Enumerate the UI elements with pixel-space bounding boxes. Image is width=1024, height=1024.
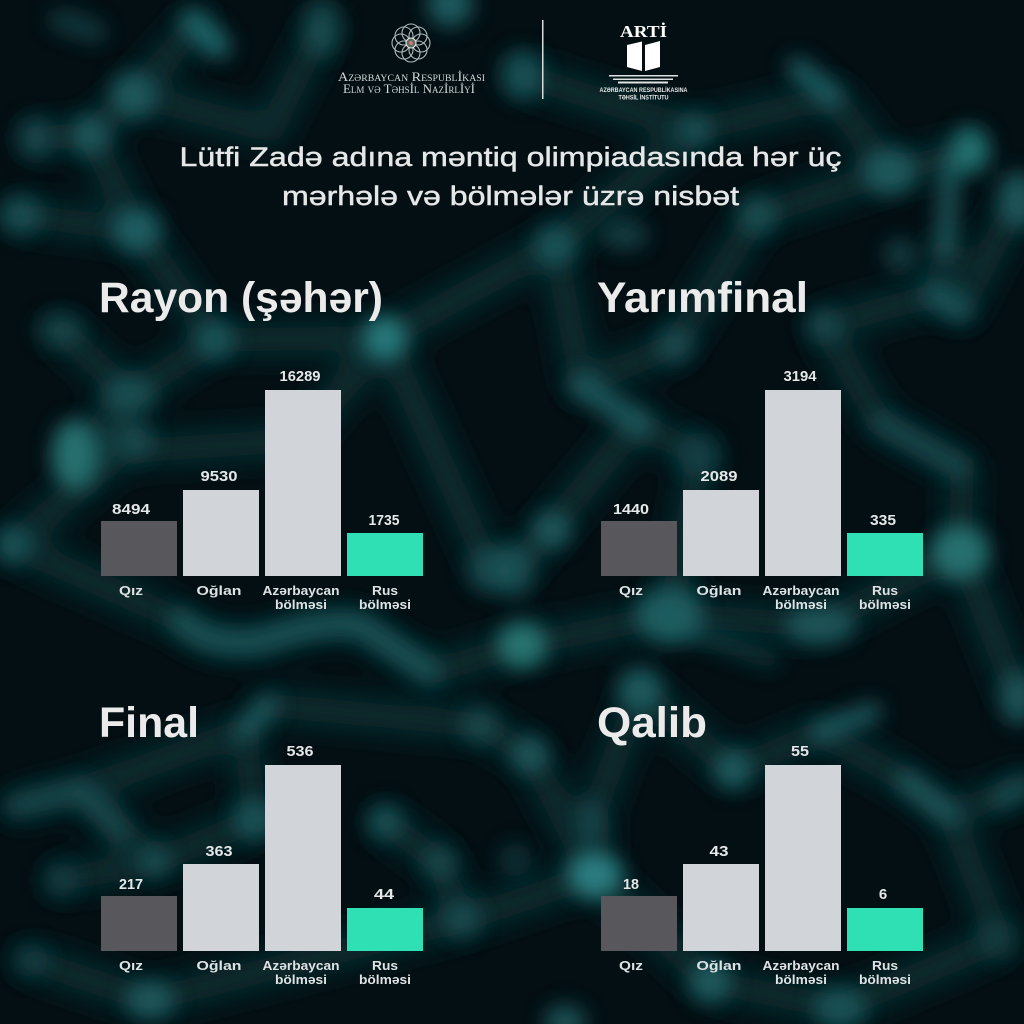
institute name: AZƏRBAYCAN RESPUBLİKASINA <box>600 87 688 94</box>
bar chart: bölməsi <box>275 972 327 987</box>
icon: book base lines <box>609 75 678 84</box>
bar chart: 1735 <box>368 512 400 529</box>
bar chart: 2089 <box>700 468 738 485</box>
institute name second line: TƏHSİL İNSTİTUTU <box>618 94 668 102</box>
bar chart: Oğlan <box>696 958 742 973</box>
heading: Yarımfinal <box>597 274 808 322</box>
icon: open book <box>627 41 660 71</box>
bar chart: bölməsi <box>775 597 827 612</box>
panel: Yarımfinal <box>597 274 923 612</box>
bar chart: 9530 <box>200 468 238 485</box>
bar chart: 18 <box>623 876 639 893</box>
bar chart: 217 <box>119 876 143 893</box>
bar chart: bölməsi <box>359 597 411 612</box>
bar chart: 3194 <box>784 368 817 385</box>
logo: ministry <box>338 24 485 84</box>
divider between logos <box>542 20 544 99</box>
bar chart: Oğlan <box>196 583 242 598</box>
icon: ministry emblem <box>392 24 430 62</box>
bar chart: Azərbaycan <box>262 958 340 973</box>
bar chart: bölməsi <box>859 972 911 987</box>
bar chart <box>101 368 423 612</box>
title line 2: mərhələ və bölmələr üzrə nisbət <box>282 181 740 211</box>
bar chart: 44 <box>374 886 395 903</box>
bar chart: 16289 <box>280 368 320 385</box>
bar chart: 335 <box>870 512 896 529</box>
bar chart: Qız <box>119 958 144 973</box>
logo: ARTI <box>600 22 688 94</box>
bar chart: Oğlan <box>696 583 742 598</box>
panel: Final <box>99 699 423 987</box>
bar chart: Qız <box>119 583 144 598</box>
bar chart: Rus <box>872 958 898 973</box>
ministry name second line: Elm və Təhsİl Nazİrlİyİ <box>343 81 475 96</box>
bar chart: bölməsi <box>359 972 411 987</box>
panel: Qalib <box>597 699 923 987</box>
bar chart: 536 <box>286 743 314 760</box>
bar chart <box>601 743 923 987</box>
heading: Final <box>99 699 199 747</box>
bar chart: 6 <box>879 886 887 903</box>
bar chart: 43 <box>710 843 728 860</box>
bar chart: Rus <box>872 583 898 598</box>
heading: Qalib <box>597 699 707 747</box>
bar chart: Rus <box>372 583 398 598</box>
title line 1: Lütfi Zadə adına məntiq olimpiadasında hər üç <box>180 142 842 172</box>
bar chart <box>601 368 923 612</box>
bar chart: 363 <box>206 843 232 860</box>
bar chart: bölməsi <box>859 597 911 612</box>
bar chart: Qız <box>619 583 644 598</box>
bar chart: bölməsi <box>775 972 827 987</box>
panel: Rayon (şəhər) <box>99 274 423 612</box>
bar chart <box>101 743 423 987</box>
bar chart: 55 <box>791 743 809 760</box>
bar chart: 8494 <box>112 501 151 518</box>
bar chart: Qız <box>619 958 644 973</box>
bar chart: bölməsi <box>275 597 327 612</box>
bar chart: Azərbaycan <box>762 583 840 598</box>
bar chart: Azərbaycan <box>762 958 840 973</box>
bar chart: 1440 <box>613 501 649 518</box>
bar chart: Rus <box>372 958 398 973</box>
ministry name: Azərbaycan Respublİkası <box>338 69 485 84</box>
bar chart: Oğlan <box>196 958 242 973</box>
bar chart: Azərbaycan <box>262 583 340 598</box>
ARTI wordmark: ARTİ <box>620 22 667 41</box>
heading: Rayon (şəhər) <box>99 274 383 322</box>
